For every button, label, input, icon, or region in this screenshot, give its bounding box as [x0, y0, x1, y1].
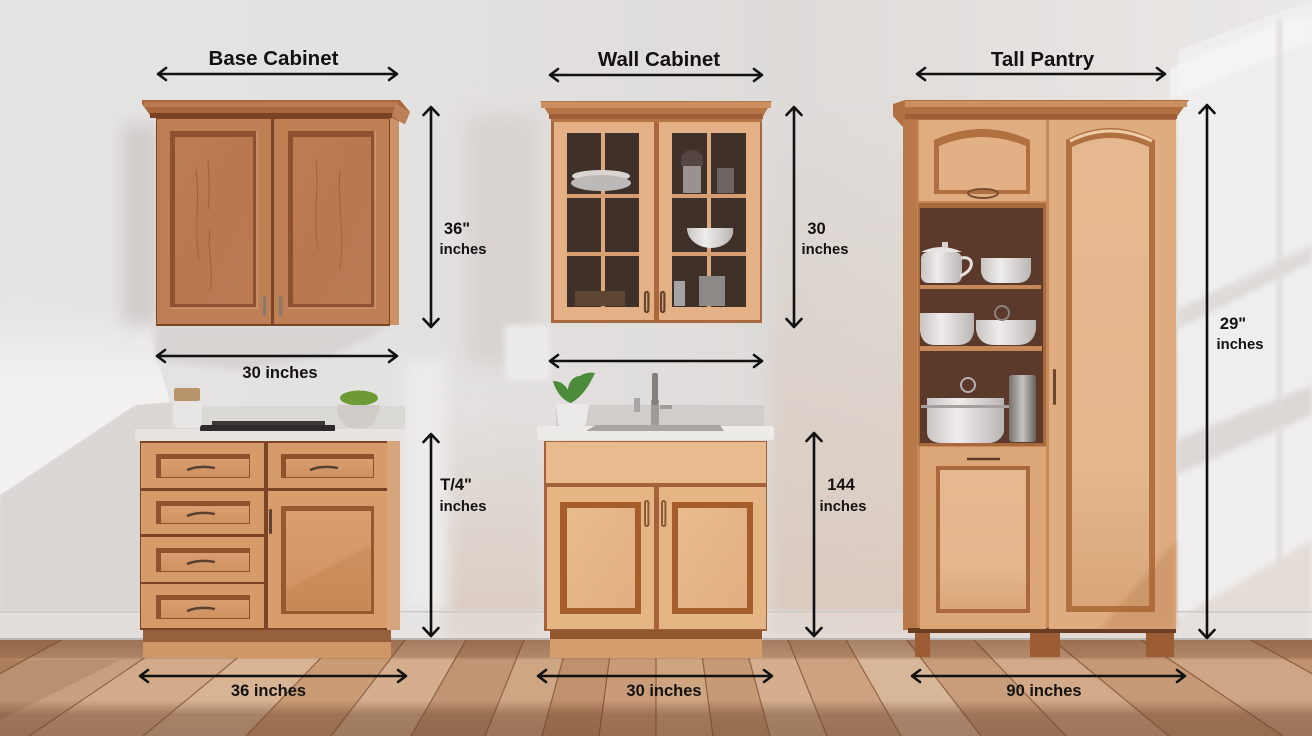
- steel canister: [1009, 375, 1036, 442]
- top cupboard door: [919, 119, 1046, 201]
- lower cupboard door: [920, 447, 1046, 629]
- side and body: [903, 118, 1176, 630]
- left glass door: [554, 119, 654, 320]
- label: T/4 inches height: T/4": [440, 476, 472, 494]
- arrow: tall pantry depth: [912, 670, 1185, 682]
- label: 36 inches height: 36": [444, 220, 470, 238]
- heading: Base Cabinet: Base Cabinet: [209, 47, 339, 70]
- right glass door: [659, 119, 760, 320]
- wood floor: [0, 640, 1312, 736]
- door handles: [645, 292, 664, 312]
- panel: upper middle glass cabinet: [540, 101, 772, 323]
- arrow: tall pantry width: [917, 68, 1165, 80]
- jar: [173, 388, 202, 428]
- arrow: upper middle cabinet height: [786, 107, 802, 327]
- arrow: tall pantry height: [1200, 105, 1214, 638]
- plinth shadow: [908, 628, 1176, 633]
- left door: [157, 119, 271, 324]
- door handles: [263, 296, 282, 316]
- potted plant: [553, 373, 595, 426]
- backsplash: [556, 405, 764, 427]
- arrow: upper left cabinet height: [424, 107, 438, 327]
- cabinet body: [544, 441, 767, 631]
- lidded bowl: [976, 306, 1036, 345]
- heading: Tall Pantry: Tall Pantry: [991, 48, 1095, 71]
- cabinet side: [387, 440, 400, 630]
- cabinet body: [156, 118, 390, 326]
- label: 29 inches height: [1217, 315, 1263, 353]
- backsplash: [172, 406, 405, 430]
- cabinet body: [551, 118, 762, 323]
- crown molding: [142, 100, 410, 124]
- label: 144 inches height: 144: [827, 476, 856, 494]
- door handles: [645, 501, 665, 526]
- arrow: wall cabinet title width: [550, 69, 762, 81]
- tall door: [1049, 119, 1176, 629]
- label: 144 inches height: [820, 476, 866, 515]
- drawer 4: [141, 584, 264, 628]
- arrow: lower left cabinet height: [424, 434, 438, 636]
- label: 30 inches lower width: 30 inches: [626, 682, 702, 700]
- drawer 1: [141, 443, 264, 488]
- panel: lower left base cabinet: [135, 388, 405, 658]
- arrow: lower middle cabinet width: [538, 670, 772, 682]
- sink basin: [586, 425, 724, 431]
- panel: upper left wall cabinet: [142, 100, 410, 326]
- cabinet side: [388, 118, 399, 325]
- cabinet body: [140, 441, 390, 630]
- drawer 3: [141, 537, 264, 582]
- label: 30 inches height: [802, 220, 848, 258]
- white bowl: [981, 258, 1031, 283]
- label: 144 inches height: inches: [820, 499, 866, 515]
- left door: [547, 487, 654, 629]
- toe kick: [143, 630, 391, 658]
- toe kick: [550, 630, 762, 658]
- arrow: upper left cabinet width: [157, 350, 397, 362]
- arrow: upper middle cabinet width: [550, 355, 762, 367]
- label: T/4 inches height: [440, 476, 486, 515]
- countertop: [537, 426, 774, 440]
- white mixing bowl: [920, 313, 974, 345]
- right door: [268, 491, 387, 628]
- cooktop: [200, 421, 335, 431]
- label: 36 inches height: [440, 220, 486, 258]
- label: 30 inches width: 30 inches: [242, 364, 318, 382]
- panel: tall pantry: [893, 100, 1189, 657]
- arrow: lower middle cabinet height: [806, 433, 822, 636]
- label: 90 inches width: 90 inches: [1006, 682, 1082, 700]
- large stock pot: [921, 378, 1011, 443]
- label: T/4 inches height: inches: [440, 499, 486, 515]
- arrow: lower left cabinet width: [140, 670, 406, 682]
- heading: Wall Cabinet: Wall Cabinet: [598, 48, 720, 71]
- crown molding: [893, 100, 1189, 127]
- label: 36 inches height: inches: [440, 242, 486, 258]
- label: 30 inches height: inches: [802, 242, 848, 258]
- open shelves: [918, 203, 1046, 446]
- top drawer front: [546, 442, 766, 483]
- right door: [659, 487, 766, 629]
- label: 29 inches height: 29": [1220, 315, 1246, 333]
- drawer 2: [141, 491, 264, 534]
- sun diagonal on pantry: [1100, 540, 1176, 629]
- pantry legs: [915, 630, 1174, 657]
- countertop: [135, 429, 403, 441]
- white lidded pot: [921, 242, 971, 283]
- top right drawer: [268, 443, 387, 488]
- right door: [274, 119, 389, 324]
- faucet: [634, 373, 672, 425]
- label: 29 inches height: inches: [1217, 337, 1263, 353]
- label: 30 inches height: 30: [807, 220, 826, 238]
- plant bowl: [337, 390, 380, 428]
- panel: lower middle sink cabinet: [537, 373, 774, 658]
- arrow: base cabinet title width: [158, 68, 397, 80]
- crown molding: [540, 101, 772, 122]
- label: 36 inches width: 36 inches: [231, 682, 306, 700]
